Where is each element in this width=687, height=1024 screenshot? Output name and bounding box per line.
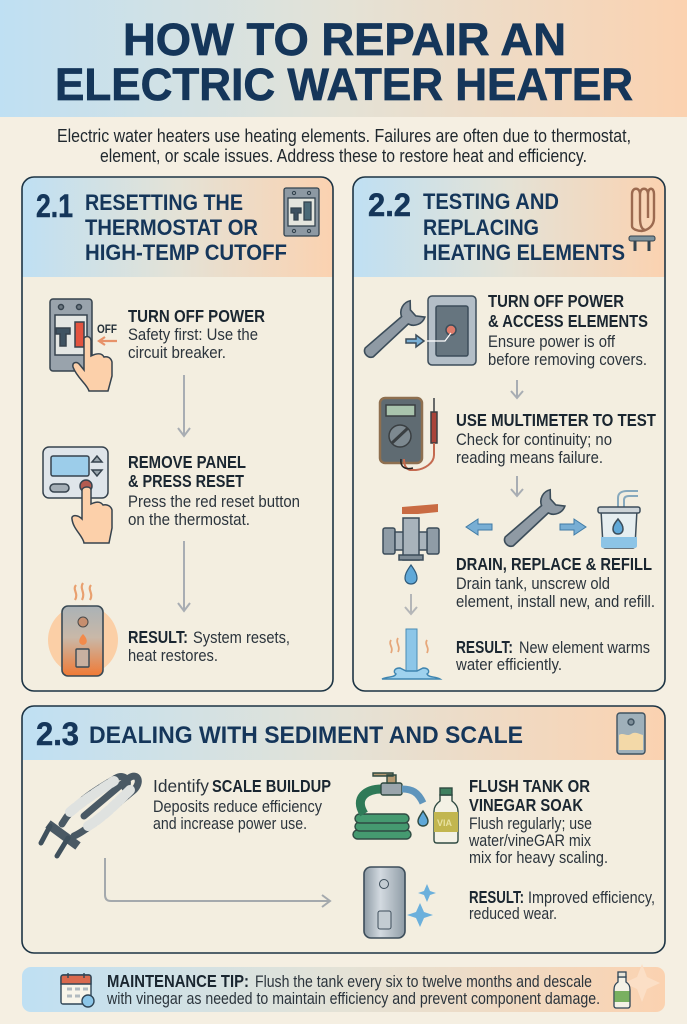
step text: TURN OFF POWER — [488, 291, 624, 311]
step: result — [48, 583, 290, 676]
icon: clean tank with sparkles — [364, 867, 436, 938]
icon: hot water heater — [48, 583, 118, 676]
heading 2.1: THERMOSTAT OR — [85, 215, 258, 240]
step text: SCALE BUILDUP — [212, 776, 331, 796]
icon: scaled tank — [617, 713, 645, 754]
arrow — [178, 375, 190, 436]
step text — [468, 776, 608, 867]
step text: RESULT: — [469, 887, 524, 907]
heading 2.1: 2.1 — [36, 188, 73, 224]
step text: System resets, — [193, 629, 290, 647]
step text — [153, 776, 331, 833]
step text: heat restores. — [128, 647, 218, 665]
title: HOW TO REPAIR AN — [123, 14, 566, 65]
title — [55, 14, 633, 110]
tip text: Flush the tank every six to twelve months and descale — [255, 973, 592, 991]
step: drain replace refill — [383, 489, 655, 614]
icon: water drop — [405, 565, 417, 584]
icon: water splash — [382, 629, 440, 679]
step text: water efficiently. — [455, 656, 562, 674]
step text: Safety first: Use the — [128, 326, 258, 344]
step: multimeter — [380, 398, 656, 470]
step text: VINEGAR SOAK — [469, 795, 583, 815]
icon: refill tank — [598, 491, 640, 548]
icon: bottle — [614, 972, 630, 1008]
step text — [128, 452, 300, 529]
panel: 2.2 testing and replacing — [353, 177, 665, 691]
step text: before removing covers. — [488, 351, 647, 369]
arrow left — [466, 519, 492, 535]
tip text: MAINTENANCE TIP: — [107, 971, 249, 991]
icon: drain valve — [383, 504, 439, 560]
heading 2.3 — [36, 716, 523, 752]
heading 2.3: 2.3 — [36, 716, 79, 752]
step text: New element warms — [519, 639, 650, 657]
step text: & PRESS RESET — [128, 471, 244, 491]
heading 2.1 — [36, 188, 287, 265]
step text — [469, 887, 655, 923]
step text: Deposits reduce efficiency — [153, 798, 323, 816]
heading 2.3: DEALING WITH SEDIMENT AND SCALE — [89, 722, 523, 749]
icon: access panel — [406, 296, 476, 365]
arrow — [511, 476, 523, 496]
step text: TURN OFF POWER — [128, 306, 265, 326]
step text: on the thermostat. — [128, 511, 250, 529]
off label with arrow: OFF — [97, 322, 117, 336]
step text — [128, 306, 265, 362]
step text: reduced wear. — [469, 905, 557, 923]
icon: heating element — [629, 189, 655, 251]
tip text — [106, 971, 600, 1008]
step text — [488, 291, 648, 369]
step text: & ACCESS ELEMENTS — [488, 311, 648, 331]
heading 2.2 — [368, 187, 625, 265]
icon: hose with bottle — [353, 773, 458, 843]
step: turn off power — [50, 299, 265, 391]
arrow — [511, 380, 523, 398]
step text: RESULT: — [456, 637, 513, 657]
step text: REMOVE PANEL — [128, 452, 246, 472]
icon: breaker — [284, 188, 319, 236]
panel: 2.1 resetting the thermostat — [22, 177, 333, 691]
step text: Drain tank, unscrew old — [456, 575, 610, 593]
icon: calendar — [61, 973, 94, 1007]
step text: Identify — [153, 776, 209, 796]
sparkle — [624, 964, 660, 1002]
intro text: element, or scale issues. Address these to restore heat and efficiency. — [100, 145, 587, 166]
step text: FLUSH TANK OR — [469, 776, 590, 796]
step text: water/vineGAR mix — [468, 832, 592, 850]
step text: Check for continuity; no — [456, 431, 612, 449]
step text: Improved efficiency, — [528, 889, 655, 907]
header band — [0, 0, 687, 117]
arrow right — [560, 519, 586, 535]
step text: USE MULTIMETER TO TEST — [456, 410, 656, 430]
step text: reading means failure. — [456, 449, 603, 467]
title: ELECTRIC WATER HEATER — [55, 59, 633, 110]
step text — [456, 410, 656, 467]
heading 2.2: REPLACING — [423, 215, 539, 240]
step: remove panel — [43, 447, 300, 543]
step text — [456, 554, 655, 611]
arrow — [405, 594, 417, 614]
step: result — [382, 629, 650, 679]
step text: DRAIN, REPLACE & REFILL — [456, 554, 652, 574]
step text — [128, 627, 290, 665]
step text: Ensure power is off — [488, 333, 615, 351]
step text: mix for heavy scaling. — [469, 849, 608, 867]
icon: scaled heating element — [41, 776, 138, 856]
step text: circuit breaker. — [128, 344, 226, 362]
icon: thermostat with hand — [43, 447, 112, 543]
icon: hose with bottle: VIA — [437, 818, 453, 828]
heading 2.2: HEATING ELEMENTS — [423, 240, 625, 265]
off label with arrow — [97, 322, 117, 345]
tip text: with vinegar as needed to maintain efficiency and prevent component damage. — [106, 990, 600, 1008]
panel: 2.3 sediment and scale — [22, 706, 665, 953]
heading 2.1: HIGH-TEMP CUTOFF — [85, 240, 287, 265]
step text: Flush regularly; use — [469, 815, 592, 833]
step text: element, install new, and refill. — [456, 593, 655, 611]
step text: Press the red reset button — [128, 493, 300, 511]
step: turn off power and access — [358, 291, 648, 369]
heading 2.2: TESTING AND — [423, 189, 559, 214]
step text — [455, 637, 650, 674]
icon: wrench — [498, 489, 566, 553]
step text: RESULT: — [128, 627, 188, 647]
arrow — [105, 858, 330, 907]
arrow — [178, 541, 190, 611]
heading 2.2: 2.2 — [368, 187, 411, 223]
heading 2.1: RESETTING THE — [85, 190, 243, 215]
icon: breaker with hand — [50, 299, 112, 391]
intro text — [57, 125, 631, 166]
icon: multimeter — [380, 398, 437, 470]
step text: and increase power use. — [153, 815, 307, 833]
icon: wrench — [358, 300, 426, 364]
maintenance tip bar — [22, 964, 665, 1012]
